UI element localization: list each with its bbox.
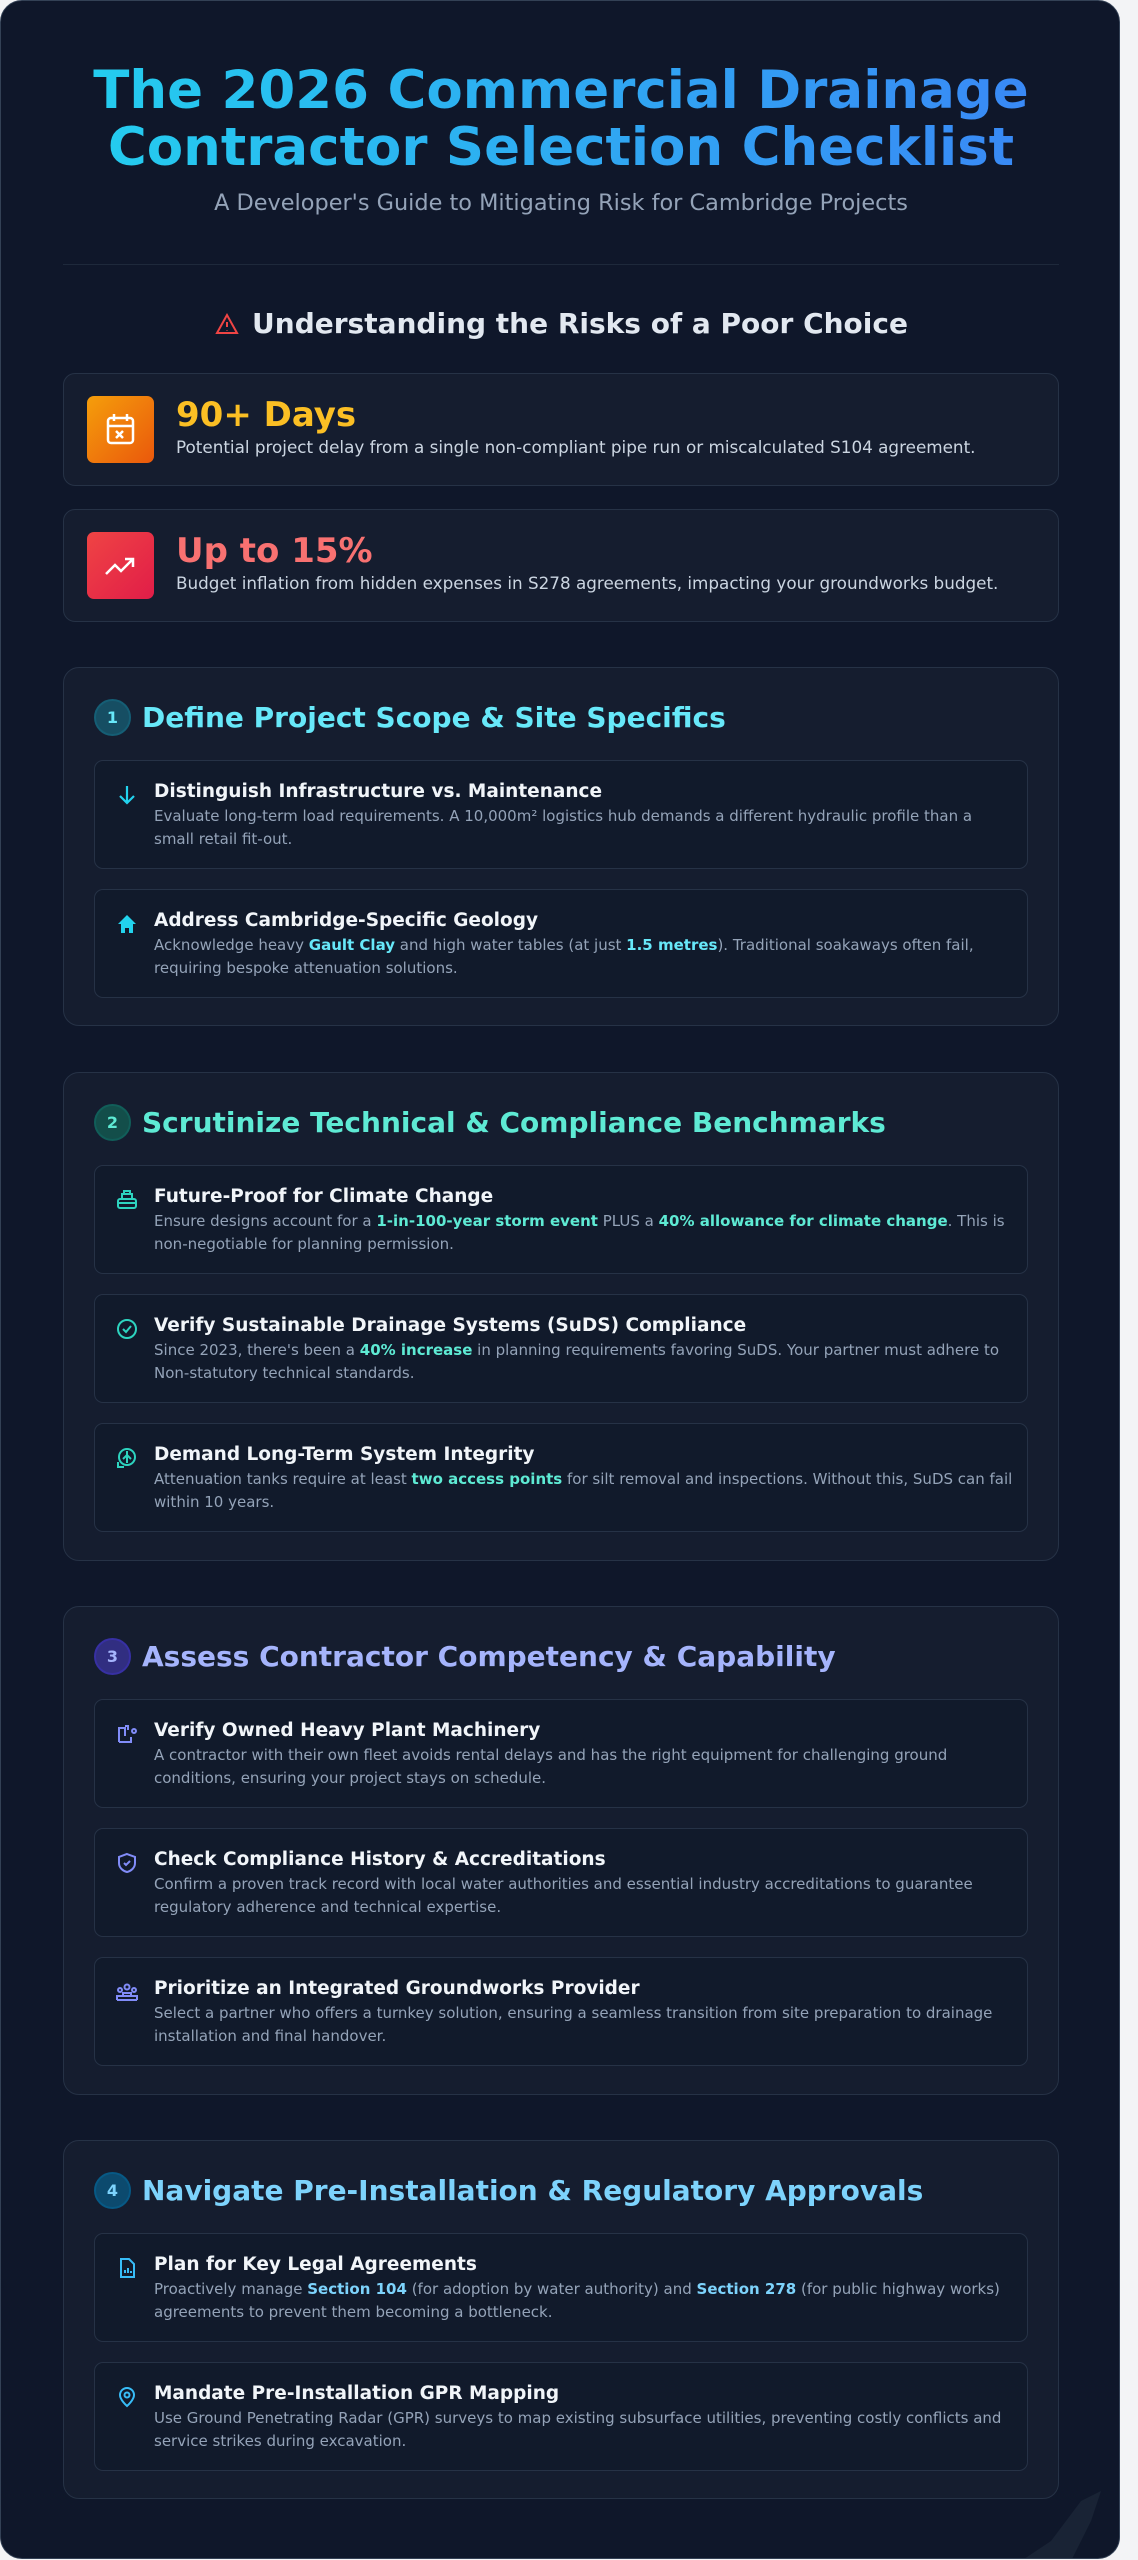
item: machinery (94, 1699, 1028, 1808)
heading 3: 3 (107, 1646, 118, 1666)
item: legal: Plan for Key Legal Agreements (154, 2254, 477, 2275)
item: compliance (94, 1828, 1028, 1937)
risk card: up to 15%: Budget inflation from hidden expenses in S278 agreements, impacting your groundworks budget. (176, 573, 998, 593)
risk card: up to 15% (63, 509, 1059, 622)
risk card: 90+ days: 90+ Days (176, 395, 356, 435)
item: infrastructure: Evaluate long-term load requirements. A 10,000m² logistics hub demands a different hydraulic profile than a small retail fit-out. (154, 807, 972, 848)
item: gpr: Use Ground Penetrating Radar (GPR) surveys to map existing subsurface utilities, preventing costly conflicts and service strikes during excavation. (154, 2409, 1001, 2450)
title (1, 62, 1121, 176)
item: geology: Acknowledge heavy Gault Clay and high water tables (at just 1.5 metres). Traditional soakaways often fail, requiring bespoke attenuation solutions. (154, 936, 974, 977)
item: machinery: Verify Owned Heavy Plant Machinery (154, 1720, 540, 1741)
risk card: up to 15%: Up to 15% (176, 531, 373, 571)
icon: trend up (87, 532, 154, 599)
heading 3: Assess Contractor Competency & Capability (142, 1640, 836, 1672)
panel: 3 competency (63, 1606, 1059, 2095)
heading: risks: Understanding the Risks of a Poor Choice (252, 307, 908, 340)
item: legal: Proactively manage Section 104 (for adoption by water authority) and Section 278 (for public highway works) agreements to prevent them becoming a bottleneck. (154, 2280, 1000, 2321)
panel: 4 approvals (63, 2140, 1059, 2499)
subtitle: A Developer's Guide to Mitigating Risk for Cambridge Projects (214, 190, 908, 216)
heading 4: 4 (107, 2180, 118, 2200)
panel: 2 technical (63, 1072, 1059, 1561)
item: suds (94, 1294, 1028, 1403)
item: geology (94, 889, 1028, 998)
item: integrity (94, 1423, 1028, 1532)
item: integrity: Attenuation tanks require at least two access points for silt removal and inspections. Without this, SuDS can fail within 10 years. (154, 1470, 1012, 1511)
item: machinery: A contractor with their own fleet avoids rental delays and has the right equipment for challenging ground conditions, ensuring your project stays on schedule. (154, 1746, 947, 1787)
item: climate (94, 1165, 1028, 1274)
title: Contractor Selection Checklist (108, 117, 1014, 178)
item: compliance: Check Compliance History & Accreditations (154, 1849, 606, 1870)
icon: calendar (87, 396, 154, 463)
heading 1: Define Project Scope & Site Specifics (142, 700, 726, 734)
heading 4: Navigate Pre-Installation & Regulatory Approvals (142, 2174, 923, 2206)
item: climate: Ensure designs account for a 1-in-100-year storm event PLUS a 40% allowance for climate change. This is non-negotiable for planning permission. (154, 1212, 1005, 1253)
item: suds: Since 2023, there's been a 40% increase in planning requirements favoring SuDS. Your partner must adhere to Non-statutory technical standards. (154, 1341, 999, 1382)
item: integrated: Select a partner who offers a turnkey solution, ensuring a seamless transition from site preparation to drainage installation and final handover. (154, 2004, 992, 2045)
risk card: 90+ days: Potential project delay from a single non-compliant pipe run or miscalculated S104 agreement. (176, 437, 976, 457)
item: gpr (94, 2362, 1028, 2471)
item: integrated: Prioritize an Integrated Groundworks Provider (154, 1978, 640, 1999)
heading 2: Scrutinize Technical & Compliance Benchmarks (142, 1106, 886, 1138)
item: legal (94, 2233, 1028, 2342)
item: compliance: Confirm a proven track record with local water authorities and essential industry accreditations to guarantee regulatory adherence and technical expertise. (154, 1875, 973, 1916)
item: gpr: Mandate Pre-Installation GPR Mapping (154, 2383, 559, 2404)
panel: 1 define scope (63, 667, 1059, 1026)
heading 2: 2 (107, 1112, 118, 1132)
item: integrity: Demand Long-Term System Integrity (154, 1444, 534, 1465)
risk card: 90+ days (63, 373, 1059, 486)
item: suds: Verify Sustainable Drainage Systems (SuDS) Compliance (154, 1315, 746, 1336)
item: infrastructure: Distinguish Infrastructure vs. Maintenance (154, 781, 602, 802)
heading 1: 1 (107, 708, 118, 726)
title: The 2026 Commercial Drainage (93, 60, 1029, 121)
item: infrastructure (94, 760, 1028, 869)
item: geology: Address Cambridge-Specific Geology (154, 910, 538, 931)
item: climate: Future-Proof for Climate Change (154, 1186, 493, 1207)
item: integrated (94, 1957, 1028, 2066)
